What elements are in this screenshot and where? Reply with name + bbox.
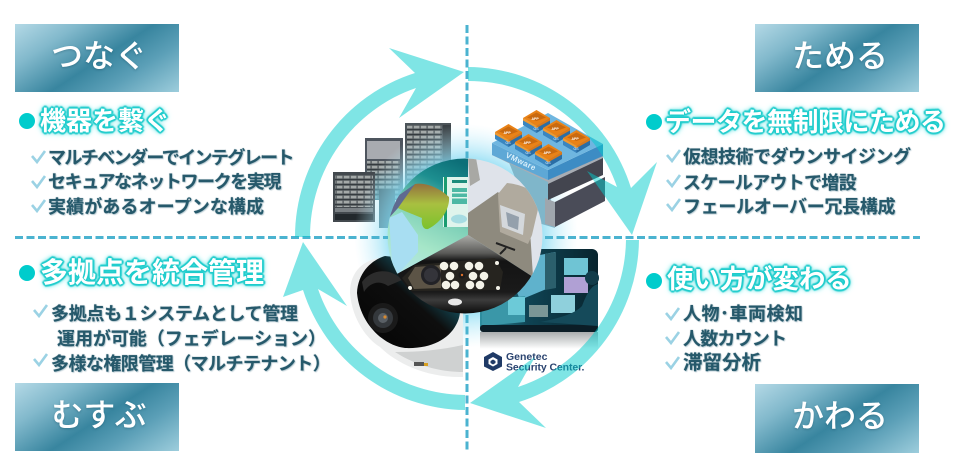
logo: Genetec Security Center (484, 351, 585, 374)
list item: マルチベンダーでインテグレート (48, 148, 293, 168)
VMware label: VMware (504, 151, 538, 173)
check (665, 307, 680, 321)
check (665, 356, 680, 370)
sector: bullet camera (468, 158, 542, 276)
image: VMware virtualised server stack: APP (532, 117, 539, 121)
check (31, 150, 46, 164)
image: VMware virtualised server stack: APP (572, 137, 579, 141)
title: かわる (755, 384, 919, 453)
title: ためる (755, 24, 919, 92)
list item: スケールアウトで増設 (683, 173, 856, 193)
bullet (19, 113, 35, 129)
image: VMware virtualised server stack: OS (506, 141, 511, 145)
gloved hand (398, 184, 449, 229)
arrow: bottom-left arc to つなぐ (283, 242, 465, 410)
list item: 滞留分析 (683, 352, 761, 374)
title: ためる: ためる (792, 38, 888, 74)
list item: フェールオーバー冗長構成 (683, 197, 895, 217)
list item: 多様な権限管理（マルチテナント） (51, 354, 330, 374)
check (31, 199, 46, 213)
image: VMware virtualised server stack (492, 110, 605, 228)
list item continuation: 運用が可能（フェデレーション） (57, 329, 326, 349)
heading: 機器を繋ぐ (40, 106, 170, 136)
VMware platform (492, 143, 548, 180)
check (666, 198, 681, 212)
glow behind central circle (354, 124, 578, 348)
sector: laboratory hand (388, 158, 468, 274)
panel: 多拠点を統合管理 (19, 253, 330, 374)
logo: Genetec Security Center: Security Center. (506, 362, 585, 374)
arrow: top-left arc to ためる (295, 48, 464, 237)
server left faces (508, 160, 555, 228)
lower server (555, 177, 605, 227)
check (666, 174, 681, 188)
image: VMware virtualised server stack: APP (504, 131, 511, 135)
image: VMware virtualised server stack: APP (524, 141, 531, 145)
bullet (646, 114, 662, 130)
list item: 多拠点も１システムとして管理 (51, 304, 298, 324)
check (31, 175, 46, 189)
title: むすぶ: むすぶ (51, 397, 147, 433)
panel: データを無制限にためる (646, 104, 948, 217)
title: かわる: かわる (792, 398, 888, 434)
check (666, 149, 681, 163)
central circle with three photo sectors (388, 158, 542, 314)
logo: Genetec Security Center: Genetec (506, 351, 548, 363)
list item: 人物･車両検知 (683, 304, 804, 324)
list item: 人数カウント (683, 329, 786, 349)
sleeve (389, 212, 418, 274)
panel: 使い方が変わる (646, 260, 854, 374)
image: network switch racks (333, 123, 451, 228)
arrow: top-right arc to かわる (468, 67, 657, 235)
image: dome security camera (350, 256, 463, 377)
image: VMware virtualised server stack: OS (546, 161, 551, 165)
sector: licence plate camera (398, 235, 532, 314)
image: VMware virtualised server stack: APP (544, 151, 551, 155)
arrow: bottom-right arc to むすぶ (470, 240, 639, 428)
image: VMware virtualised server stack: OS (554, 137, 559, 141)
image: VMware virtualised server stack: OS (574, 147, 579, 151)
barcode panel (443, 177, 468, 227)
list item: 実績があるオープンな構成 (48, 197, 264, 217)
upper server (548, 156, 603, 200)
list item: セキュアなネットワークを実現 (48, 172, 280, 192)
title: むすぶ (15, 383, 179, 451)
heading: 多拠点を統合管理 (40, 257, 264, 288)
image: monitoring room video wall (480, 249, 599, 349)
image: VMware virtualised server stack: APP (552, 127, 559, 131)
image: VMware virtualised server stack: OS (534, 127, 539, 131)
check (33, 353, 48, 367)
title: つなぐ: つなぐ (51, 38, 147, 74)
bullet (646, 273, 662, 289)
heading: 使い方が変わる (667, 264, 852, 294)
panel: 機器を繋ぐ (19, 102, 294, 217)
image: VMware virtualised server stack: OS (526, 151, 531, 155)
heading: データを無制限にためる (665, 107, 946, 137)
check (665, 331, 680, 345)
bullet (19, 265, 35, 281)
title: つなぐ (15, 24, 179, 92)
list item: 仮想技術でダウンサイジング (683, 147, 910, 167)
check (33, 304, 48, 318)
